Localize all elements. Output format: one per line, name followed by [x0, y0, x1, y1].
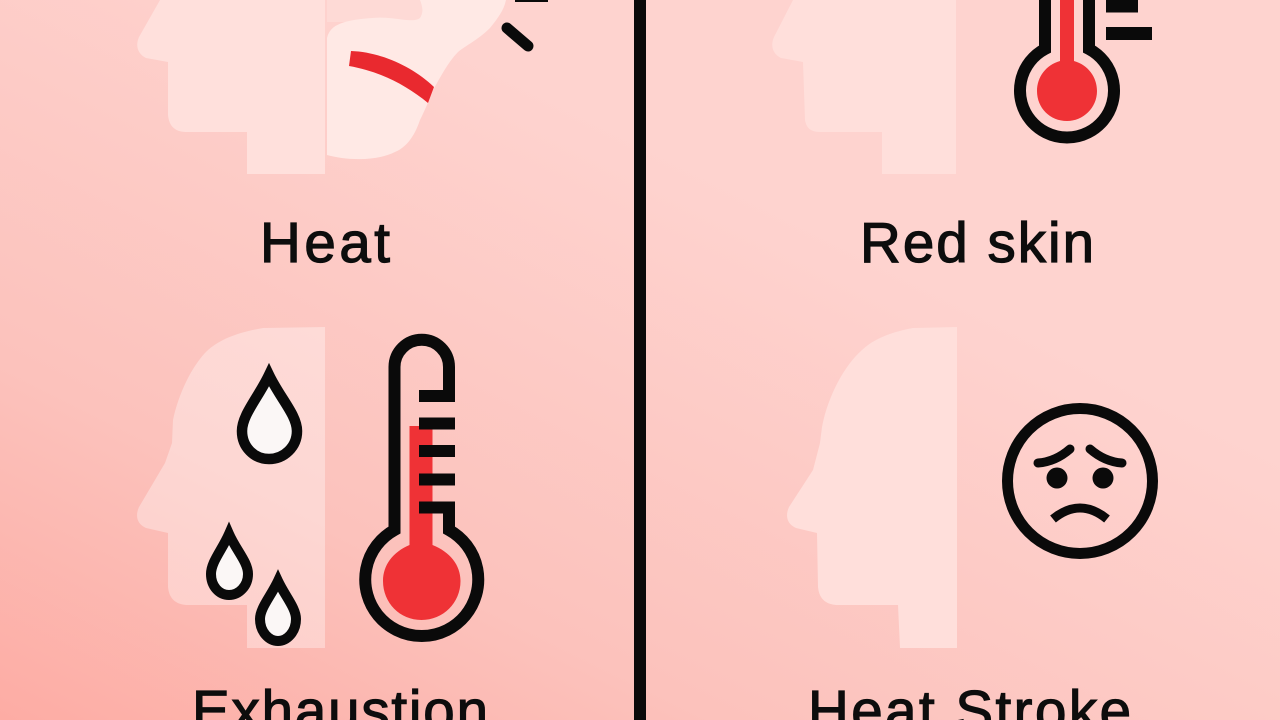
icon: head silhouette top left — [137, 0, 325, 174]
divider — [634, 0, 646, 720]
icon: head silhouette lower left — [137, 327, 325, 648]
icon: upper neck shade — [327, 0, 422, 22]
icon: large thermometer — [365, 340, 478, 636]
icon: small sweat drop left — [211, 534, 248, 595]
icon: neck and heat area — [327, 0, 506, 159]
icon: small thermometer — [1020, 0, 1152, 138]
panel: red skin top right — [772, 0, 1152, 274]
panel: heat exhaustion bottom left — [137, 327, 488, 720]
panel: heat stroke bottom right — [787, 327, 1152, 720]
icon: worried face — [1008, 408, 1152, 554]
icon: small sweat drop right — [260, 581, 296, 641]
panel: heat symptoms top left — [137, 0, 548, 274]
icon: sun fragment — [515, 0, 548, 2]
heading: Heat: Heat — [260, 211, 390, 274]
icon: heat ray — [507, 28, 528, 46]
icon: red neck band — [349, 51, 434, 103]
icon: head silhouette lower right — [787, 327, 957, 648]
icon: large sweat drop — [242, 375, 297, 459]
icon: head silhouette top right — [772, 0, 956, 174]
heading: Red skin: Red skin — [860, 211, 1094, 274]
